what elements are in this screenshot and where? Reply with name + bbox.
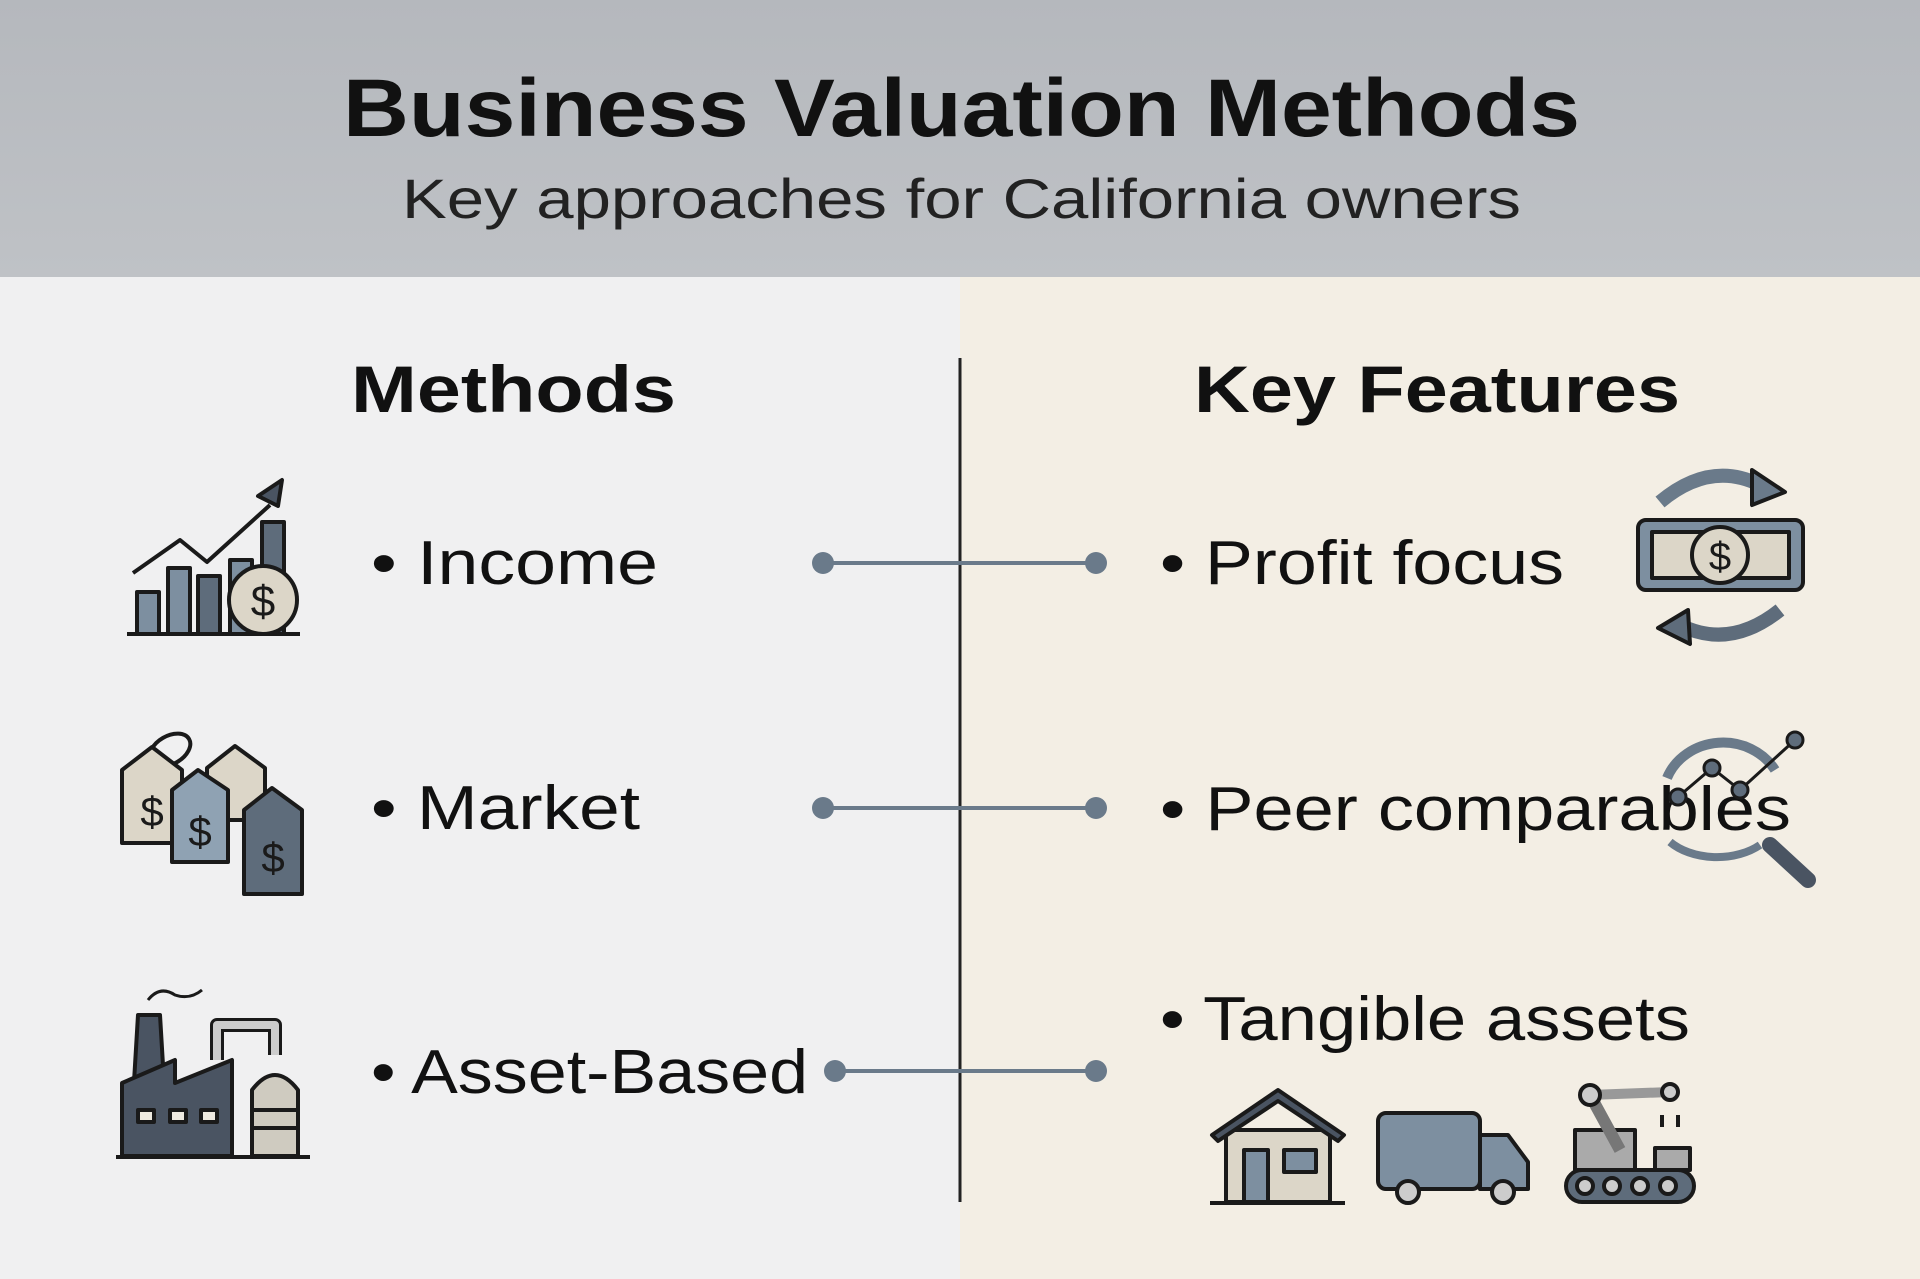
panel: header bbox=[0, 0, 1920, 277]
icon: money cycle bbox=[1638, 470, 1803, 644]
icon: income chart: $ bbox=[251, 577, 275, 626]
icon: price tags: $ bbox=[140, 788, 164, 835]
icon: truck bbox=[1378, 1113, 1528, 1203]
bullet text: income: • Income bbox=[371, 529, 658, 598]
bullet text: market: • Market bbox=[371, 774, 640, 843]
connector: market bbox=[812, 797, 1107, 819]
icon: price tags: $ bbox=[261, 834, 285, 881]
title: Business Valuation Methods bbox=[343, 63, 1580, 154]
icon: price tags: $ bbox=[188, 808, 212, 855]
bullet text: asset-based: • Asset-Based bbox=[371, 1038, 808, 1107]
icon: money cycle: $ bbox=[1709, 535, 1731, 579]
icon: robot arm bbox=[1566, 1084, 1694, 1202]
bullet text: profit focus: • Profit focus bbox=[1160, 529, 1564, 598]
bullet text: peer comparables: • Peer comparables bbox=[1160, 775, 1791, 844]
connector: income bbox=[812, 552, 1107, 574]
heading: key features: Key Features bbox=[1194, 352, 1680, 426]
subtitle: Key approaches for California owners bbox=[402, 167, 1521, 230]
icon: factory bbox=[116, 990, 310, 1157]
icon: income chart bbox=[127, 480, 300, 634]
bullet text: tangible assets: • Tangible assets bbox=[1160, 985, 1690, 1054]
icons: tangible assets bbox=[1210, 1084, 1694, 1203]
icon: house bbox=[1210, 1090, 1345, 1203]
heading: methods: Methods bbox=[351, 352, 676, 426]
connector: asset-based bbox=[824, 1060, 1107, 1082]
icon: magnifier chart bbox=[1667, 732, 1808, 880]
divider bbox=[958, 358, 962, 1202]
icon: price tags bbox=[122, 727, 302, 894]
